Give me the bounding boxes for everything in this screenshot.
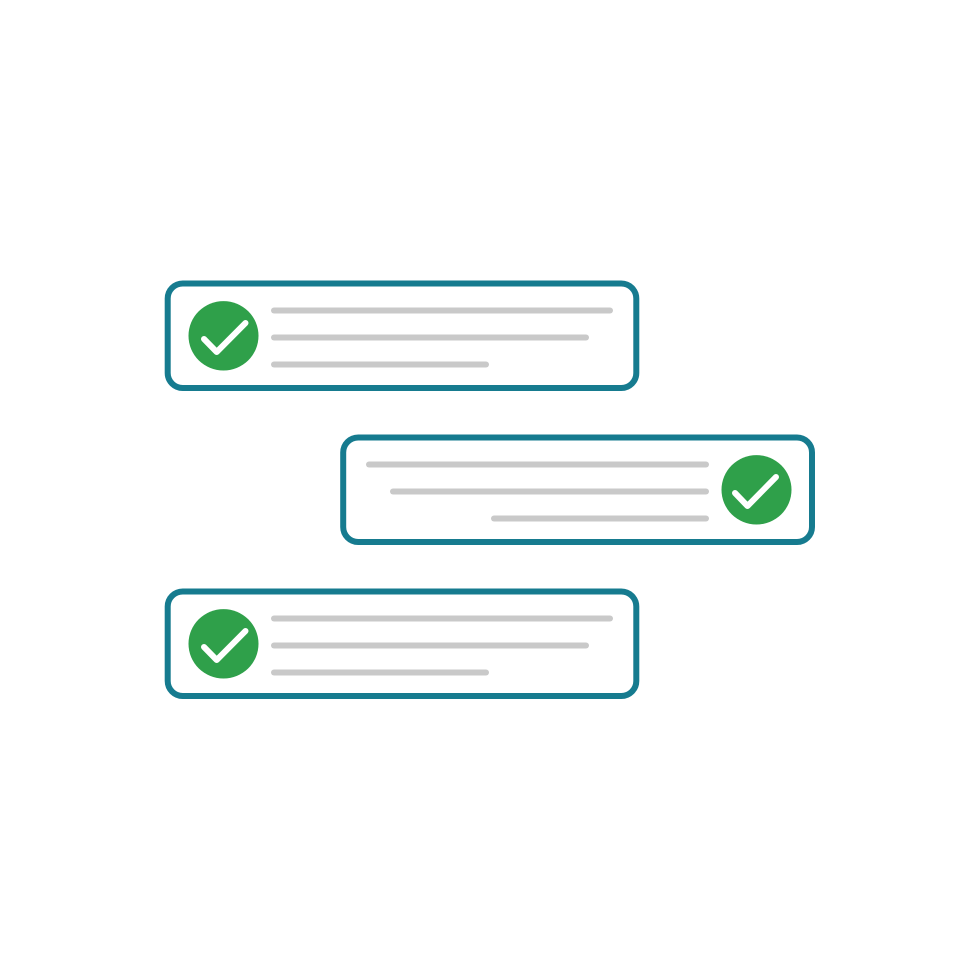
panel: middle card [343,438,812,542]
panel: bottom card [168,592,636,696]
text lines: middle card [366,462,709,522]
icon: middle check badge [722,455,792,524]
icon: bottom check badge [188,609,258,678]
text lines: bottom card [271,616,613,676]
text lines: top card [271,308,613,368]
icon: top check badge [188,301,258,370]
panel: top card [168,284,636,388]
